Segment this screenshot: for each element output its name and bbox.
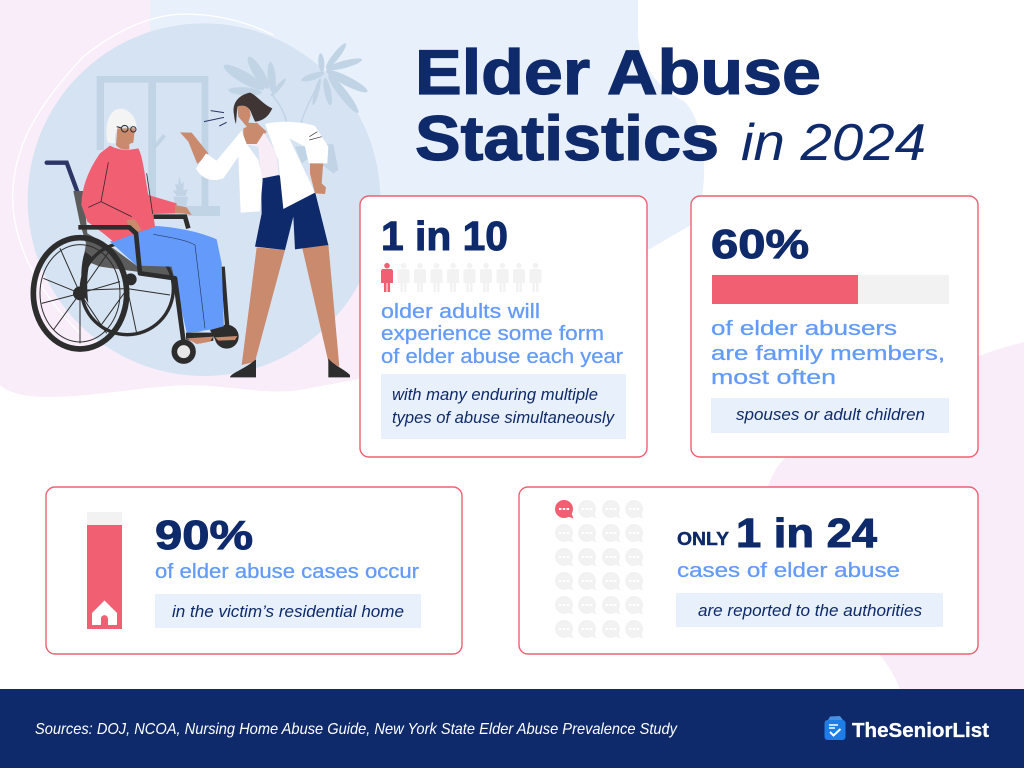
panel: 90% [46, 487, 462, 654]
stat: 1 in 10: 1 in 10 [381, 213, 508, 259]
stat: only 1 in 24: 1 in 24 [736, 510, 877, 556]
trousers [110, 226, 224, 333]
callout: with many enduring multiple [392, 385, 598, 404]
legs [242, 247, 285, 365]
logo [824, 716, 989, 742]
title: Elder Abuse [415, 38, 821, 108]
hair [234, 93, 272, 124]
palm leaves [221, 41, 370, 173]
icon row: ten people [381, 263, 542, 292]
glasses [117, 125, 136, 132]
stat: 90%: 90% [155, 512, 253, 558]
panel: 1 in 24 [519, 487, 978, 654]
description text: of elder abuse each year [381, 346, 623, 368]
callout [711, 398, 949, 433]
title: in 2024 [741, 114, 926, 172]
hair [106, 109, 137, 143]
description text [381, 301, 623, 368]
icon grid: speech bubbles [555, 500, 644, 638]
sources: Sources: DOJ, NCOA, Nursing Home Abuse Guide, New York State Elder Abuse Prevalence Study [35, 721, 678, 738]
wheelchair back parts [47, 163, 239, 349]
white coat [196, 131, 263, 213]
title [415, 38, 926, 174]
shoes [186, 333, 213, 343]
panel: 1 in 10 [360, 196, 647, 457]
description text: experience some form [381, 323, 604, 345]
description text: of elder abusers [711, 318, 897, 340]
shirt [243, 133, 279, 179]
callout: in the victim’s residential home [172, 602, 404, 621]
chest [243, 123, 267, 145]
callout [676, 593, 943, 627]
shout lines [204, 111, 227, 126]
illustration backdrop circle [28, 23, 380, 376]
callout [155, 594, 421, 628]
panel: 60% [691, 196, 978, 457]
potted plant [173, 176, 188, 207]
neck and face [116, 128, 135, 150]
stat: only 1 in 24: ONLY [677, 529, 729, 549]
description text: of elder abuse cases occur [155, 561, 419, 583]
description text: older adults will [381, 301, 540, 323]
face [237, 104, 258, 128]
wheelchair front parts [33, 227, 193, 361]
description text [711, 318, 945, 389]
stat: 60%: 60% [711, 221, 809, 267]
footer band [0, 689, 1024, 768]
callout: are reported to the authorities [698, 601, 922, 620]
logo: TheSeniorList [852, 720, 989, 742]
description text: are family members, [711, 343, 945, 365]
caregiver woman [180, 93, 350, 377]
shorts [255, 175, 328, 250]
bar with house icon [87, 512, 122, 629]
window [97, 76, 220, 216]
stat: only 1 in 24 [677, 510, 877, 556]
callout: types of abuse simultaneously [392, 408, 615, 427]
description text: cases of elder abuse [677, 560, 900, 582]
description text: most often [711, 367, 836, 389]
arms [180, 132, 208, 164]
sweater [81, 146, 177, 242]
title: Statistics [415, 104, 719, 174]
callout: spouses or adult children [736, 405, 925, 424]
elder woman [81, 109, 238, 344]
shoes [230, 359, 256, 377]
illustration: caregiver shouting at elder in wheelchair [13, 14, 380, 377]
progress bar [712, 275, 949, 304]
hands [175, 205, 192, 215]
callout [381, 374, 626, 439]
